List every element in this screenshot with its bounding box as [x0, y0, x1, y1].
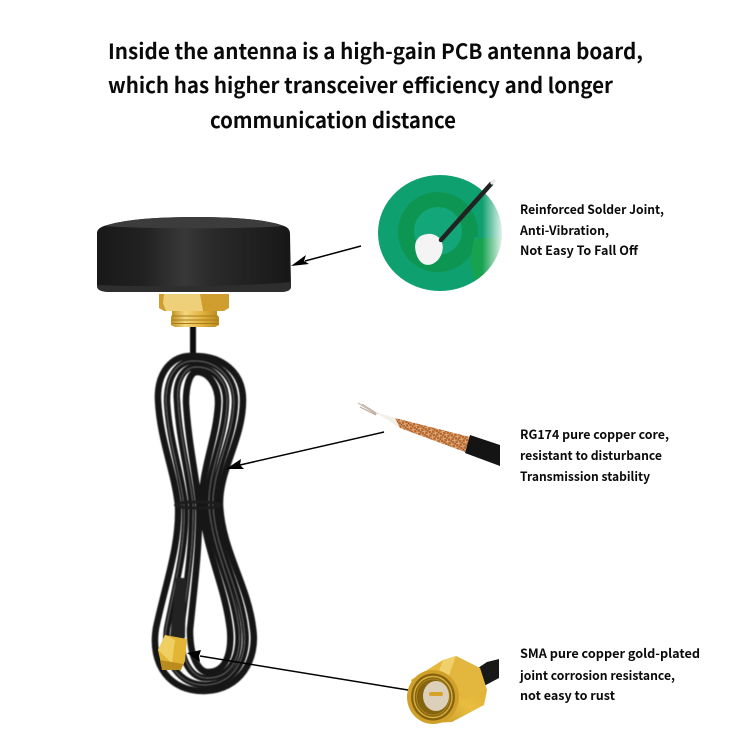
- label: RG174 cable: [520, 424, 669, 485]
- label: solder joint: Not Easy To Fall Off: [520, 240, 639, 259]
- cable coil: [155, 326, 254, 691]
- antenna dome: [97, 217, 291, 292]
- arrow: dome: [291, 246, 361, 266]
- label: SMA connector: not easy to rust: [520, 685, 616, 704]
- label: RG174 cable: resistant to disturbance: [520, 445, 662, 464]
- label: SMA connector: joint corrosion resistance,: [519, 665, 675, 684]
- brass nut and thread: [159, 294, 229, 327]
- label: SMA connector: SMA pure copper gold-plated: [520, 643, 700, 662]
- small SMA connector: [158, 635, 187, 670]
- coax cable detail: [358, 403, 500, 466]
- label: RG174 cable: RG174 pure copper core,: [520, 424, 669, 443]
- PCB board detail: [378, 170, 505, 295]
- title: which has higher transceiver efficiency and longer: [108, 70, 614, 100]
- gold SMA connector detail: [407, 656, 499, 724]
- title: communication distance: [210, 105, 456, 135]
- title: [108, 36, 643, 135]
- arrow: connector: [187, 650, 408, 690]
- label: RG174 cable: Transmission stability: [520, 466, 650, 485]
- label: solder joint: [519, 199, 664, 259]
- label: solder joint: Reinforced Solder Joint,: [520, 199, 664, 218]
- label: solder joint: Anti-Vibration,: [519, 220, 609, 239]
- label: SMA connector: [519, 643, 700, 704]
- title: Inside the antenna is a high-gain PCB antenna board,: [108, 36, 643, 66]
- arrow: cable: [226, 432, 384, 469]
